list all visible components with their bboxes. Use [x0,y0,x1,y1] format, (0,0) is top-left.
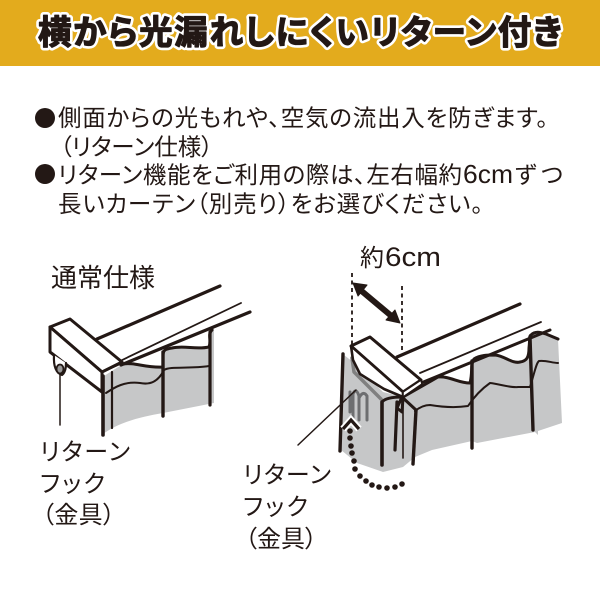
label: return hook right [243,462,331,553]
bullet [35,164,55,184]
curtain fabric [103,328,214,434]
bullet text two continued: 長いカーテン（別売り）をお選びください。 [58,191,483,217]
diagram: return rail and curtain [298,304,562,472]
label: return hook right: リターン [243,462,331,489]
hook leader line [298,390,356,445]
label: return hook left [40,439,130,529]
label: about 6 cm: 約 [360,245,384,272]
label: standard spec: 通常仕様 [51,263,155,293]
knot [382,397,416,412]
bullet text two end: ずつ [515,162,563,188]
rail [397,304,520,357]
label: return hook right: フック [243,494,308,521]
return gray band [352,358,381,399]
icon: dotted curved arrow [343,420,405,491]
return hook [350,391,367,420]
rail [97,286,220,339]
dimension guides [352,273,402,350]
label: return hook right: （金具） [245,526,317,553]
bullet [35,108,55,128]
icon: double arrow [353,283,400,323]
label: return hook left: フック [40,471,105,498]
top wave [403,332,558,397]
bullet text one continued: （リターン仕様） [60,134,213,160]
title outline: 横から光漏れしにくいリターン付き [38,15,562,52]
bullet text two size: 6cm [463,159,513,189]
label: return hook left: リターン [40,439,130,466]
label: about 6 cm: 6cm [385,242,441,272]
return hook [54,355,66,375]
label: about 6 cm [360,242,441,272]
hook leader line [59,374,61,425]
title: 横から光漏れしにくいリターン付き [38,15,562,52]
lower wave [415,361,558,411]
label: return hook left: （金具） [42,502,115,529]
diagram: standard rail and curtain [50,286,250,435]
title banner [0,0,600,66]
description text [35,105,563,217]
corner bracket [50,319,122,372]
pleats [470,361,474,448]
bullet text two: リターン機能をご利用の際は、左右幅約 [58,162,462,188]
curtain fabric [341,332,562,472]
bullet text one: 側面からの光もれや、空気の流出入を防ぎます。 [58,105,548,131]
corner bracket [351,337,421,392]
